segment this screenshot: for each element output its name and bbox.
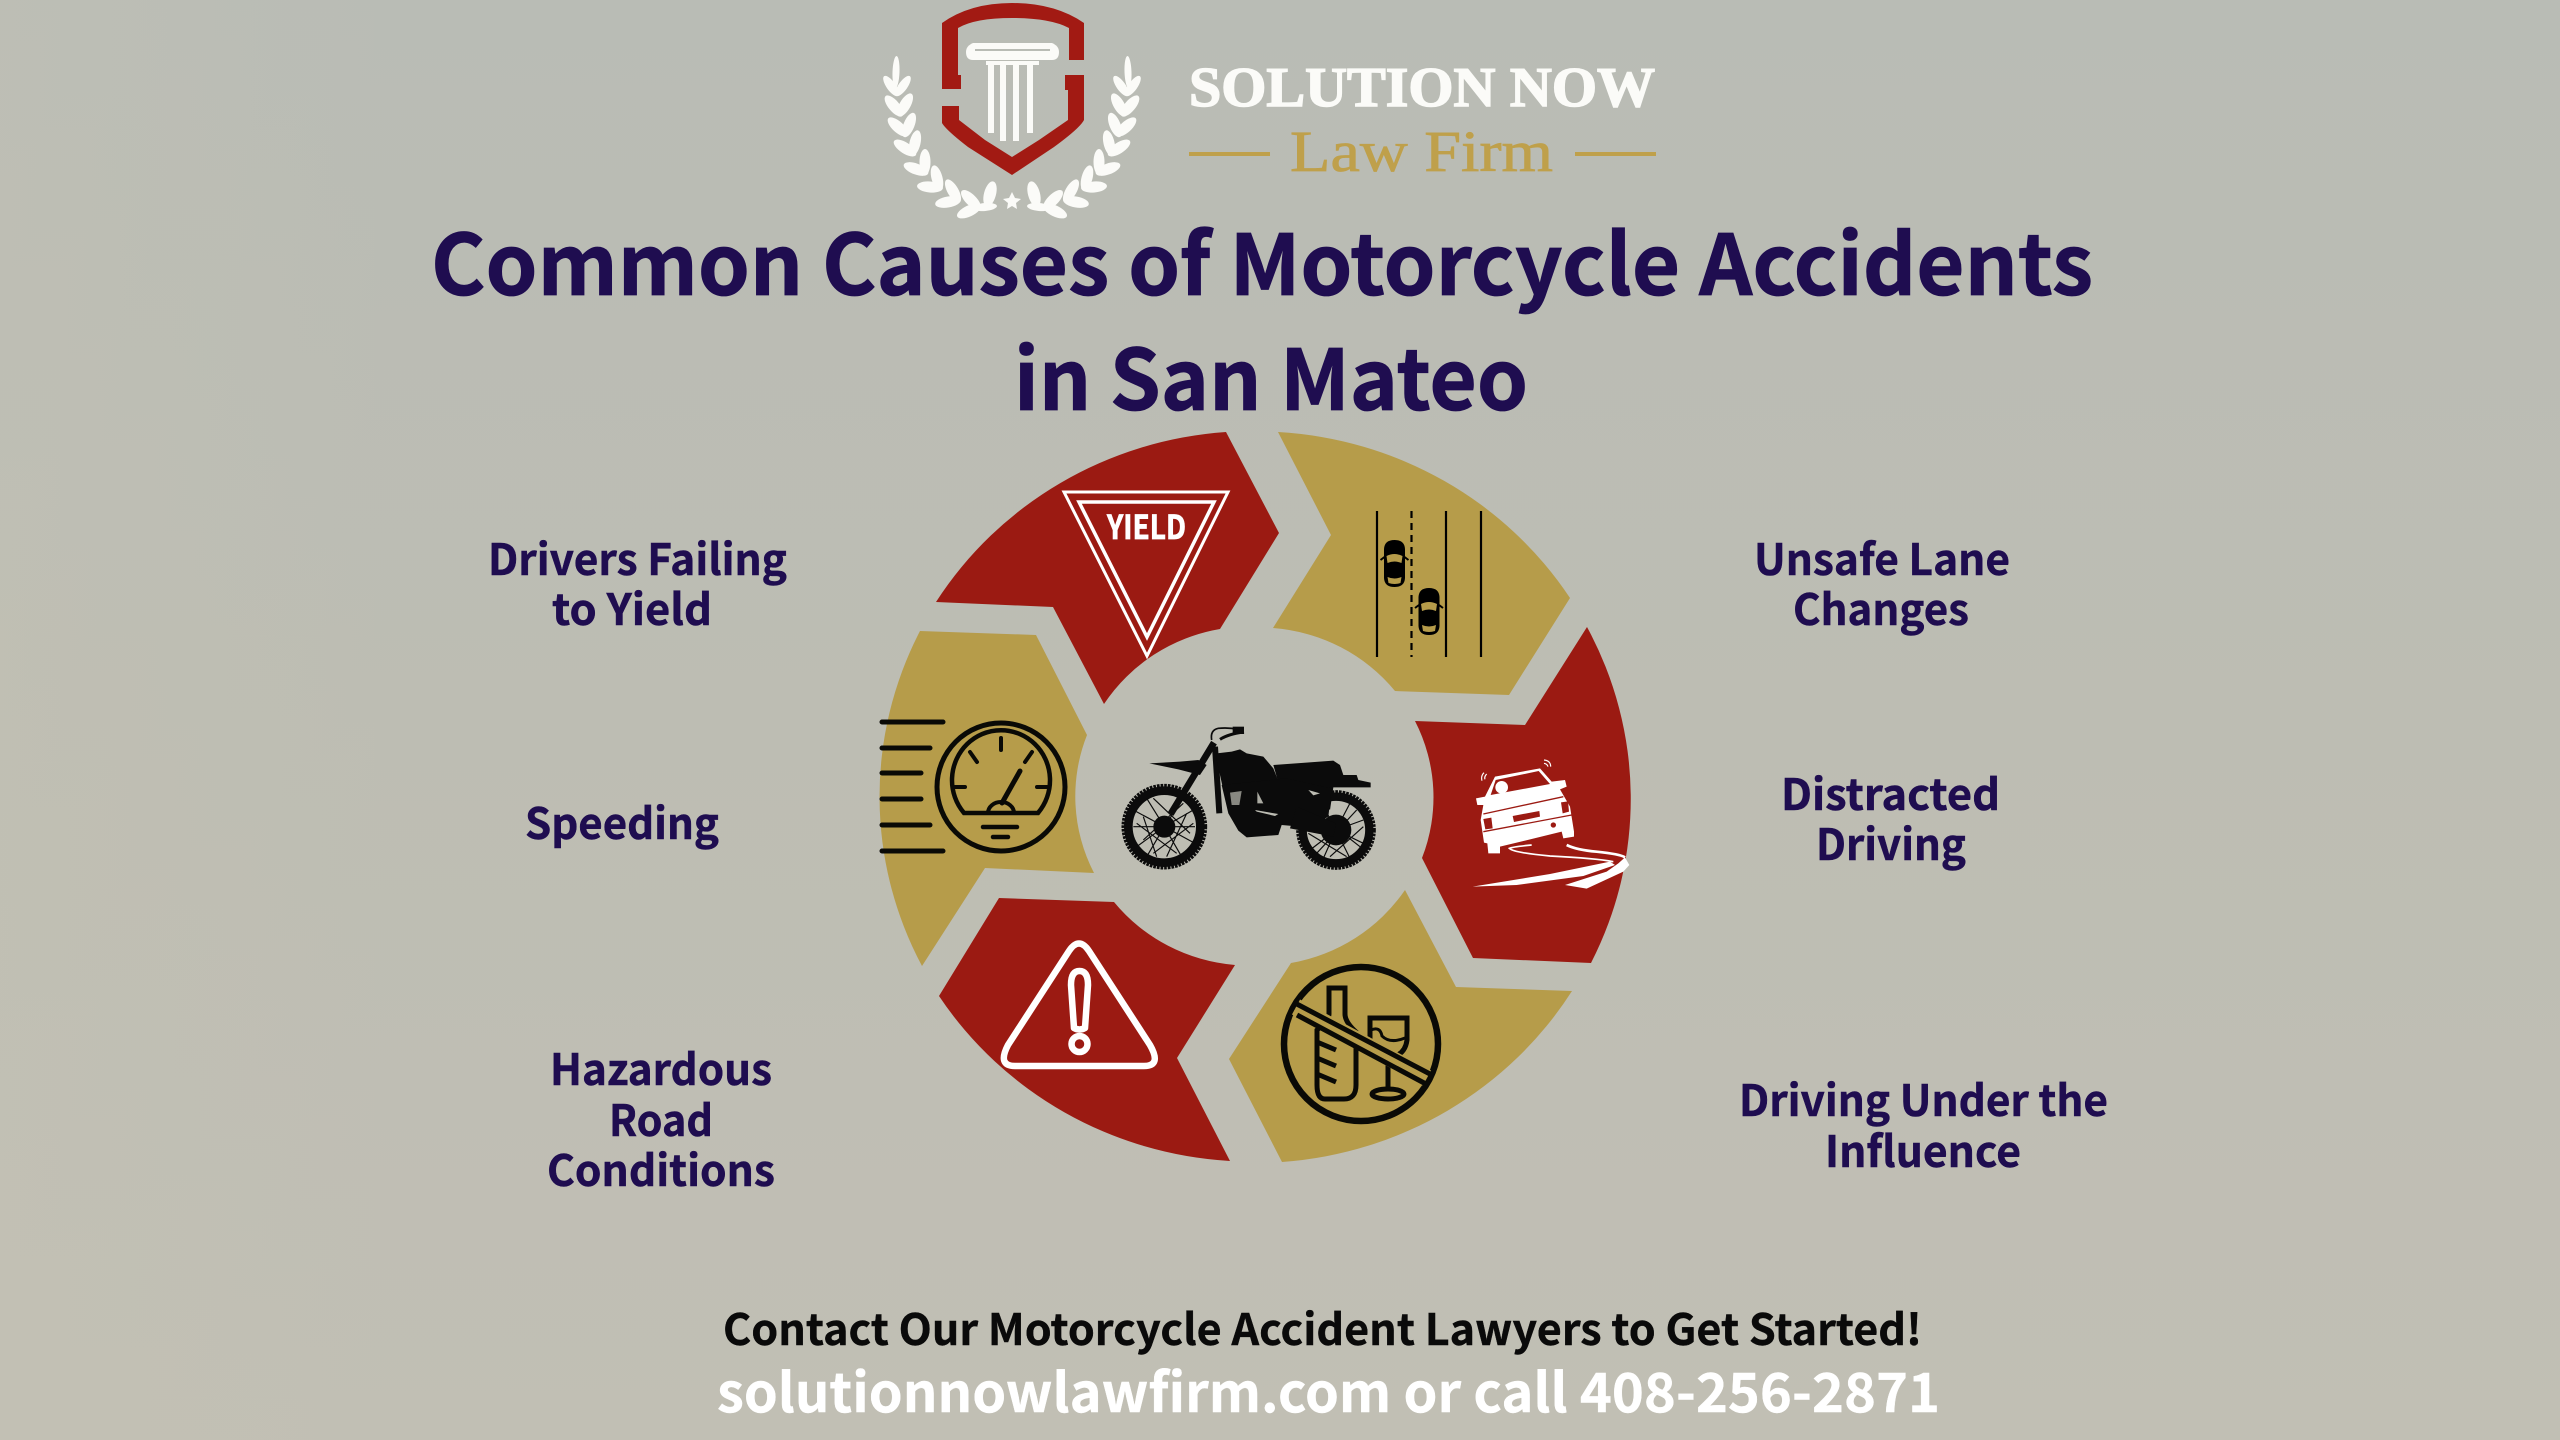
label: driving under the influence: Driving Under the <box>1739 1067 2108 1129</box>
icon: distracted driver car <box>1473 760 1629 889</box>
icon: lanes and cars <box>1377 511 1481 657</box>
call to action: solutionnowlawfirm.com or call 408-256-2871 <box>717 1349 1940 1428</box>
label: distracted driving <box>1781 761 2000 873</box>
icon: warning triangle <box>1004 944 1155 1066</box>
swerving road <box>1473 862 1615 887</box>
segment: speeding <box>880 631 1094 966</box>
label: unsafe lane changes <box>1754 526 2010 638</box>
title: Common Causes of Motorcycle Accidents <box>431 199 2093 320</box>
panel: segmented cause wheel <box>880 432 1631 1162</box>
label: distracted driving: Distracted <box>1781 761 2000 823</box>
title <box>431 199 2093 435</box>
icon: no drink driving <box>1284 967 1438 1121</box>
icon: white column <box>966 43 1059 141</box>
label: hazardous road conditions: Road <box>609 1087 713 1149</box>
icon: yield sign <box>1064 492 1228 656</box>
logo subtitle: Law Firm <box>1290 119 1553 184</box>
front wheel <box>1123 785 1206 868</box>
label: driving under the influence: Influence <box>1825 1118 2021 1180</box>
rear wheel <box>1298 792 1374 868</box>
fork and bars <box>1171 727 1244 814</box>
logo wordmark: SOLUTION NOW <box>1189 57 1655 119</box>
label: distracted driving: Driving <box>1816 811 1966 873</box>
label: hazardous road conditions <box>547 1036 775 1199</box>
icon: laurel wreath <box>880 56 1144 221</box>
label: unsafe lane changes: Changes <box>1793 576 1969 638</box>
engine highlights <box>1230 790 1320 816</box>
icon: yield sign: YIELD <box>1106 501 1186 549</box>
title: in San Mateo <box>1014 314 1528 435</box>
silhouette body <box>1149 749 1371 837</box>
label: driving under the influence <box>1739 1067 2108 1180</box>
icon: speedometer <box>882 722 1065 851</box>
segment: yield <box>936 432 1279 704</box>
label: speeding: Speeding <box>525 790 719 852</box>
label: hazardous road conditions: Conditions <box>547 1137 775 1199</box>
label: drivers failing to yield: Drivers Failing <box>488 526 787 588</box>
label: drivers failing to yield <box>488 526 787 638</box>
label: unsafe lane changes: Unsafe Lane <box>1754 526 2010 588</box>
label: hazardous road conditions: Hazardous <box>550 1036 772 1098</box>
label: drivers failing to yield: to Yield <box>552 576 712 638</box>
logo: Solution Now Law Firm <box>880 3 1656 221</box>
segment: hazardous road <box>939 898 1235 1161</box>
segment: lane changes <box>1273 432 1570 695</box>
segment: DUI <box>1229 890 1572 1162</box>
icon: motorcycle <box>1123 727 1374 868</box>
call to action <box>717 1296 1940 1428</box>
call to action: Contact Our Motorcycle Accident Lawyers to Get Started! <box>723 1296 1922 1358</box>
icon: red shield <box>942 3 1084 175</box>
segment: distracted driving <box>1415 627 1631 963</box>
